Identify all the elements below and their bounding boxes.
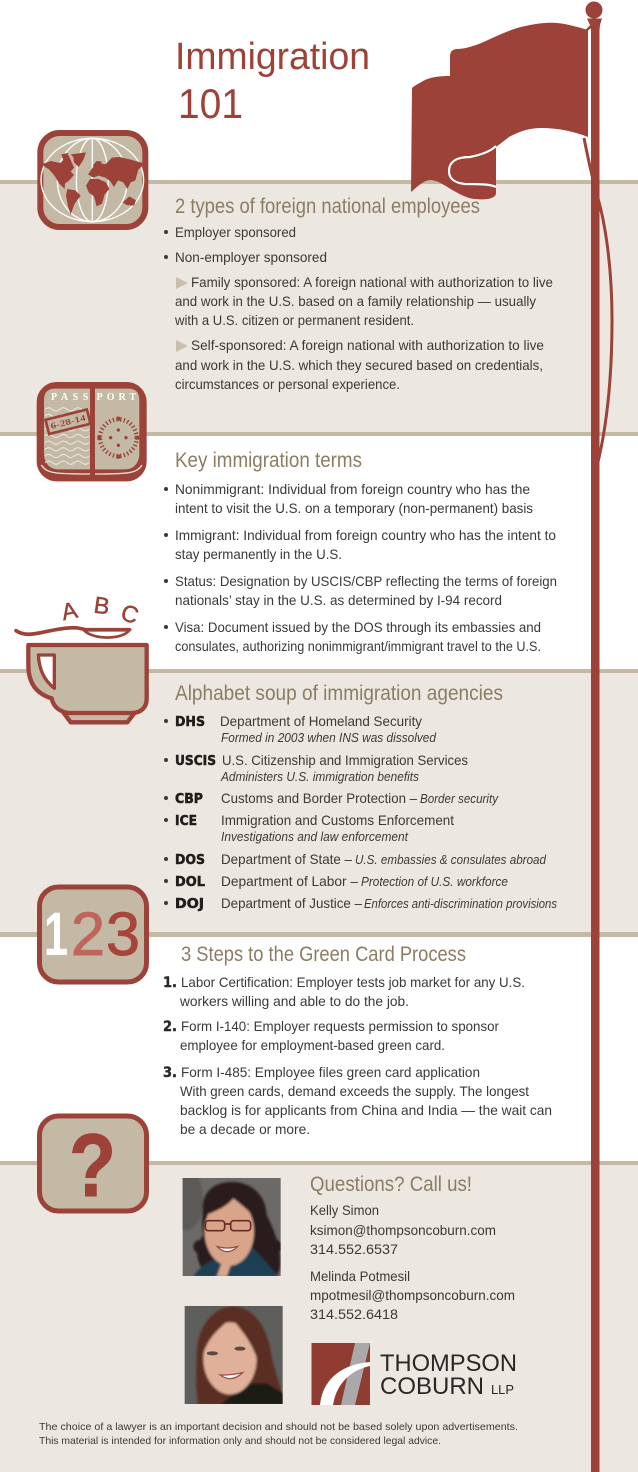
text block: DOL: Protection of U.S. workforce: [361, 875, 508, 889]
icon: 123: 2: [71, 900, 105, 968]
text block: step 2: [163, 1018, 499, 1053]
text block: sponsorship list: Non-employer sponsored: [175, 249, 327, 265]
text block: CBP: Customs and Border Protection –: [221, 790, 417, 806]
text block: DOJ: Department of Justice –: [221, 895, 362, 911]
text block: step 1: workers willing and able to do the job.: [179, 993, 409, 1009]
text block: step 2: Form I-140: Employer requests permission to sponsor: [181, 1018, 499, 1034]
icon: alphabet soup cup: A: [59, 596, 80, 625]
text block: terms list: consulates, authorizing nonimmigrant/immigrant travel to the U.S.: [175, 638, 541, 654]
text block: DHS: [164, 713, 437, 745]
text block: step 1: Labor Certification: Employer tests job market for any U.S.: [181, 974, 525, 990]
text block: sponsorship list: and work in the U.S. based on a family relationship — usually: [175, 293, 536, 309]
text block: terms list: [164, 481, 557, 654]
icon: flag on pole: [411, 2, 612, 1472]
heading: Alphabet soup of immigration agencies: [175, 682, 503, 705]
icon: 123: 3: [106, 900, 140, 968]
text block: sponsorship list: and work in the U.S. which they secured based on credentials,: [175, 357, 543, 373]
text block: DOS: [164, 851, 547, 868]
icon: alphabet soup cup: C: [118, 599, 142, 629]
icon: question mark: ?: [69, 1115, 116, 1215]
logo: Thompson Coburn LLP: COBURN: [380, 1373, 484, 1400]
text block: step 3: backlog is for applicants from China and India — the wait can: [180, 1102, 552, 1118]
text block: ICE: [164, 812, 454, 844]
text block: Kelly Simon contact: [310, 1202, 496, 1257]
text block: ICE: Immigration and Customs Enforcement: [221, 812, 454, 828]
icon: passport: 6-28-14: [49, 412, 88, 431]
text block: CBP: Border security: [420, 792, 499, 806]
text block: terms list: intent to visit the U.S. on a temporary (non-permanent) basis: [175, 500, 533, 516]
text block: ICE: ICE: [175, 814, 197, 829]
text block: legal disclaimer: This material is intended for information only and should not be considered legal advice.: [39, 1435, 441, 1447]
panel: contact details: [310, 1173, 515, 1322]
text block: terms list: Visa: Document issued by the DOS through its embassies and: [175, 619, 541, 635]
icon: passport: [39, 385, 144, 479]
text block: DHS: Department of Homeland Security: [220, 713, 422, 729]
text block: terms list: nationals’ stay in the U.S. as determined by I-94 record: [175, 592, 502, 608]
text block: step 1: 1.: [163, 975, 177, 991]
text block: CBP: CBP: [175, 792, 203, 807]
text block: USCIS: [164, 752, 468, 784]
text block: DOL: [164, 873, 508, 890]
text block: terms list: stay permanently in the U.S.: [175, 546, 342, 562]
text block: USCIS: U.S. Citizenship and Immigration Services: [222, 752, 468, 768]
heading: 2 types of foreign national employees: [175, 195, 480, 218]
icon: question mark: [40, 1115, 146, 1215]
icon: alphabet soup cup: B: [92, 592, 111, 619]
heading: 3 Steps to the Green Card Process: [181, 943, 466, 966]
text block: legal disclaimer: [39, 1421, 518, 1447]
text block: step 1: [163, 974, 525, 1009]
text block: Kelly Simon contact: Kelly Simon: [310, 1202, 379, 1218]
text block: CBP: [164, 790, 499, 807]
text block: USCIS: USCIS: [175, 754, 216, 769]
panel: key immigration terms: [164, 449, 557, 654]
text block: DOS: DOS: [175, 853, 205, 868]
text block: Melinda Potmesil contact: Melinda Potmesil: [310, 1268, 410, 1284]
text block: DHS: DHS: [175, 715, 205, 730]
panel: foreign national employee types: [164, 195, 553, 392]
text block: USCIS: Administers U.S. immigration benefits: [220, 770, 419, 784]
photo: Melinda Potmesil: [185, 1306, 283, 1405]
text block: terms list: Status: Designation by USCIS/CBP reflecting the terms of foreign: [175, 573, 557, 589]
text block: step 3: With green cards, demand exceeds the supply. The longest: [180, 1083, 529, 1099]
text block: terms list: Immigrant: Individual from foreign country who has the intent to: [175, 527, 556, 543]
text block: step 3: 3.: [163, 1065, 177, 1081]
title: [175, 36, 370, 127]
text block: terms list: Nonimmigrant: Individual from foreign country who has the: [175, 481, 530, 497]
text block: Melinda Potmesil contact: mpotmesil@thompsoncoburn.com: [310, 1287, 515, 1303]
icon: passport: PASS: [51, 392, 89, 403]
text block: Kelly Simon contact: 314.552.6537: [310, 1241, 398, 1257]
text block: step 2: 2.: [163, 1019, 177, 1035]
text block: DOJ: DOJ: [175, 897, 204, 912]
photo: Kelly Simon: [182, 1178, 281, 1276]
text block: DOJ: [164, 895, 557, 912]
text block: DOS: U.S. embassies & consulates abroad: [355, 853, 547, 867]
text block: DOJ: Enforces anti-discrimination provisions: [364, 897, 557, 911]
text block: DOL: Department of Labor –: [221, 873, 358, 889]
text block: DOS: Department of State –: [221, 851, 352, 867]
icon: alphabet soup cup: [16, 592, 147, 722]
text block: step 3: [163, 1064, 552, 1137]
icon: globe: [40, 133, 145, 227]
icon: 123: [40, 887, 146, 982]
title: Immigration: [175, 36, 370, 78]
logo: Thompson Coburn LLP: LLP: [491, 1382, 514, 1397]
text block: step 2: employee for employment-based green card.: [180, 1037, 445, 1053]
text block: sponsorship list: Self-sponsored: A foreign national with authorization to live: [191, 337, 544, 353]
icon: passport: PORT: [97, 392, 136, 403]
text block: Melinda Potmesil contact: [310, 1268, 515, 1322]
logo: Thompson Coburn LLP: THOMPSON: [380, 1350, 517, 1377]
logo: Thompson Coburn LLP: [312, 1343, 517, 1405]
icon: 123: 1: [44, 900, 68, 968]
text block: Melinda Potmesil contact: 314.552.6418: [310, 1306, 398, 1322]
text block: legal disclaimer: The choice of a lawyer is an important decision and should not be based solely upon advertisements.: [39, 1421, 518, 1433]
text block: DOL: DOL: [175, 875, 205, 890]
text block: step 3: Form I-485: Employee files green card application: [181, 1064, 480, 1080]
text block: sponsorship list: with a U.S. citizen or permanent resident.: [174, 312, 414, 328]
text block: DHS: Formed in 2003 when INS was dissolved: [221, 731, 437, 745]
text block: sponsorship list: Employer sponsored: [175, 224, 296, 240]
text block: step 3: be a decade or more.: [180, 1121, 310, 1137]
text block: Kelly Simon contact: ksimon@thompsoncoburn.com: [310, 1222, 496, 1238]
heading: Questions? Call us!: [310, 1173, 472, 1196]
panel: immigration agencies: [164, 682, 557, 912]
title: 101: [178, 80, 243, 127]
heading: Key immigration terms: [175, 449, 362, 472]
text block: sponsorship list: circumstances or personal experience.: [175, 376, 400, 392]
text block: sponsorship list: [164, 224, 553, 392]
text block: ICE: Investigations and law enforcement: [221, 830, 408, 844]
panel: green card steps: [163, 943, 552, 1137]
text block: sponsorship list: Family sponsored: A foreign national with authorization to live: [191, 274, 553, 290]
